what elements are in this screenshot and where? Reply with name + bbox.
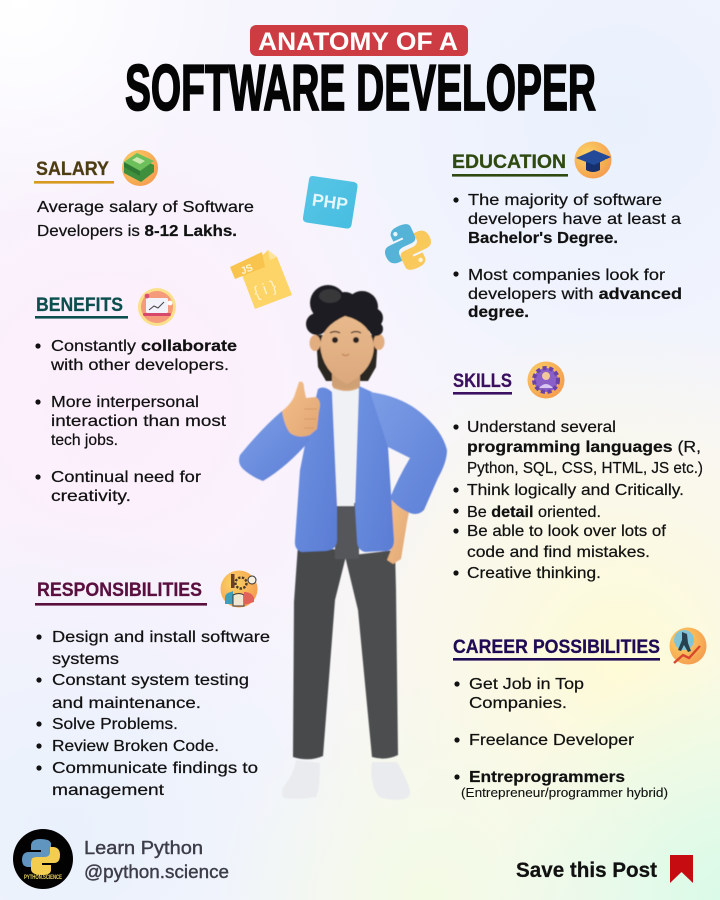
benefits list: More interpersonal <box>51 394 199 411</box>
responsibilities list: Solve Problems. <box>52 716 178 733</box>
responsibilities heading: RESPONSIBILITIES <box>37 580 202 601</box>
footer: save this post <box>516 855 693 883</box>
education list: degree. <box>468 304 529 321</box>
panel: responsibilities <box>35 570 270 799</box>
ears <box>310 335 320 351</box>
icon: team with gear <box>220 570 258 608</box>
icon: python logo <box>377 216 439 278</box>
title pill: anatomy of a: ANATOMY OF A <box>258 28 458 56</box>
title block <box>125 25 596 124</box>
career list <box>454 676 668 800</box>
icon: benefits laptop <box>138 288 176 326</box>
hair curls <box>306 285 383 336</box>
responsibilities list: Communicate findings to <box>52 760 258 777</box>
salary text: Average salary of Software <box>37 199 254 216</box>
icon: JS file: { i } <box>251 278 280 302</box>
back hair <box>316 335 378 381</box>
skills heading: SKILLS <box>453 371 512 392</box>
career list: Companies. <box>469 695 567 712</box>
icon: climbing career arrow <box>670 628 706 664</box>
benefits list: interaction than most <box>51 413 227 430</box>
account name: Learn Python <box>84 837 203 858</box>
panel: skills <box>453 362 703 582</box>
responsibilities list <box>36 629 270 799</box>
benefits list: Constantly collaborate <box>51 338 237 355</box>
jacket right panel <box>355 386 394 552</box>
benefits list: with other developers. <box>50 357 229 374</box>
career list: Entreprogrammers <box>469 769 625 786</box>
education heading: EDUCATION <box>452 152 566 173</box>
left leg and shoe <box>282 545 348 799</box>
education list: developers have at least a <box>468 211 681 228</box>
white shirt <box>332 388 359 506</box>
responsibilities list: Design and install software <box>52 629 270 646</box>
skills list: programming languages (R, <box>467 439 701 456</box>
education list <box>453 192 682 321</box>
panel: career possibilities <box>453 628 706 800</box>
benefits heading: BENEFITS <box>36 295 123 316</box>
panel: education <box>452 142 682 321</box>
career list: (Entrepreneur/programmer hybrid) <box>461 786 668 800</box>
neck shade <box>332 370 360 389</box>
responsibilities list: Review Broken Code. <box>52 738 219 755</box>
figure: developer character <box>239 285 447 800</box>
right sleeve <box>370 392 447 514</box>
skills list: Be able to look over lots of <box>467 523 667 540</box>
jacket left panel <box>295 388 337 552</box>
panel: salary <box>34 150 254 240</box>
skills list <box>453 419 703 582</box>
benefits list: creativity. <box>51 488 131 505</box>
career heading: CAREER POSSIBILITIES <box>453 637 660 658</box>
icon: JS file <box>230 250 292 309</box>
icon: PHP tile: PHP <box>311 190 350 214</box>
responsibilities list: Constant system testing <box>52 672 249 689</box>
skills list: Python, SQL, CSS, HTML, JS etc.) <box>467 460 703 477</box>
salary text <box>37 199 254 240</box>
icon: gear with person <box>528 362 564 398</box>
footer: account <box>13 829 229 889</box>
icon: JS file: JS <box>239 262 255 277</box>
career list: Freelance Developer <box>469 732 635 749</box>
responsibilities list: and maintenance. <box>52 695 201 712</box>
responsibilities list: management <box>52 782 165 799</box>
python.science badge: PYTHON.SCIENCE <box>24 874 62 881</box>
skills list: Understand several <box>467 419 616 436</box>
thumbs-up hand <box>282 382 320 437</box>
skills list: code and find mistakes. <box>467 544 650 561</box>
salary text: Developers is 8-12 Lakhs. <box>37 223 237 240</box>
skills list: Think logically and Critically. <box>467 482 684 499</box>
account name <box>84 837 229 882</box>
education list: Bachelor's Degree. <box>468 230 618 247</box>
icon: cash stack <box>122 150 158 186</box>
raised arm <box>239 411 310 481</box>
skills list: Creative thinking. <box>467 565 601 582</box>
education list: developers with advanced <box>468 286 682 303</box>
benefits list: Continual need for <box>51 469 202 486</box>
hand on hip <box>387 497 410 564</box>
panel: benefits <box>35 288 237 505</box>
pants hip <box>335 503 359 559</box>
face <box>320 316 374 384</box>
career list: Get Job in Top <box>469 676 584 693</box>
education list: The majority of software <box>468 192 662 209</box>
icon: bookmark <box>670 855 693 883</box>
head <box>306 285 384 389</box>
neck <box>333 375 359 391</box>
salary heading: SALARY <box>36 159 109 180</box>
account name: @python.science <box>84 861 229 882</box>
footer: save this post: Save this Post <box>516 859 657 882</box>
benefits list: tech jobs. <box>51 432 118 449</box>
eyes <box>332 337 338 343</box>
icon: PHP tile <box>303 176 358 229</box>
right leg and shoe <box>345 550 410 800</box>
skills list: Be detail oriented. <box>467 504 601 521</box>
icon: graduation cap <box>574 142 612 178</box>
responsibilities list: systems <box>52 651 119 668</box>
benefits list <box>35 338 237 505</box>
python.science badge <box>13 829 73 889</box>
education list: Most companies look for <box>468 267 666 284</box>
